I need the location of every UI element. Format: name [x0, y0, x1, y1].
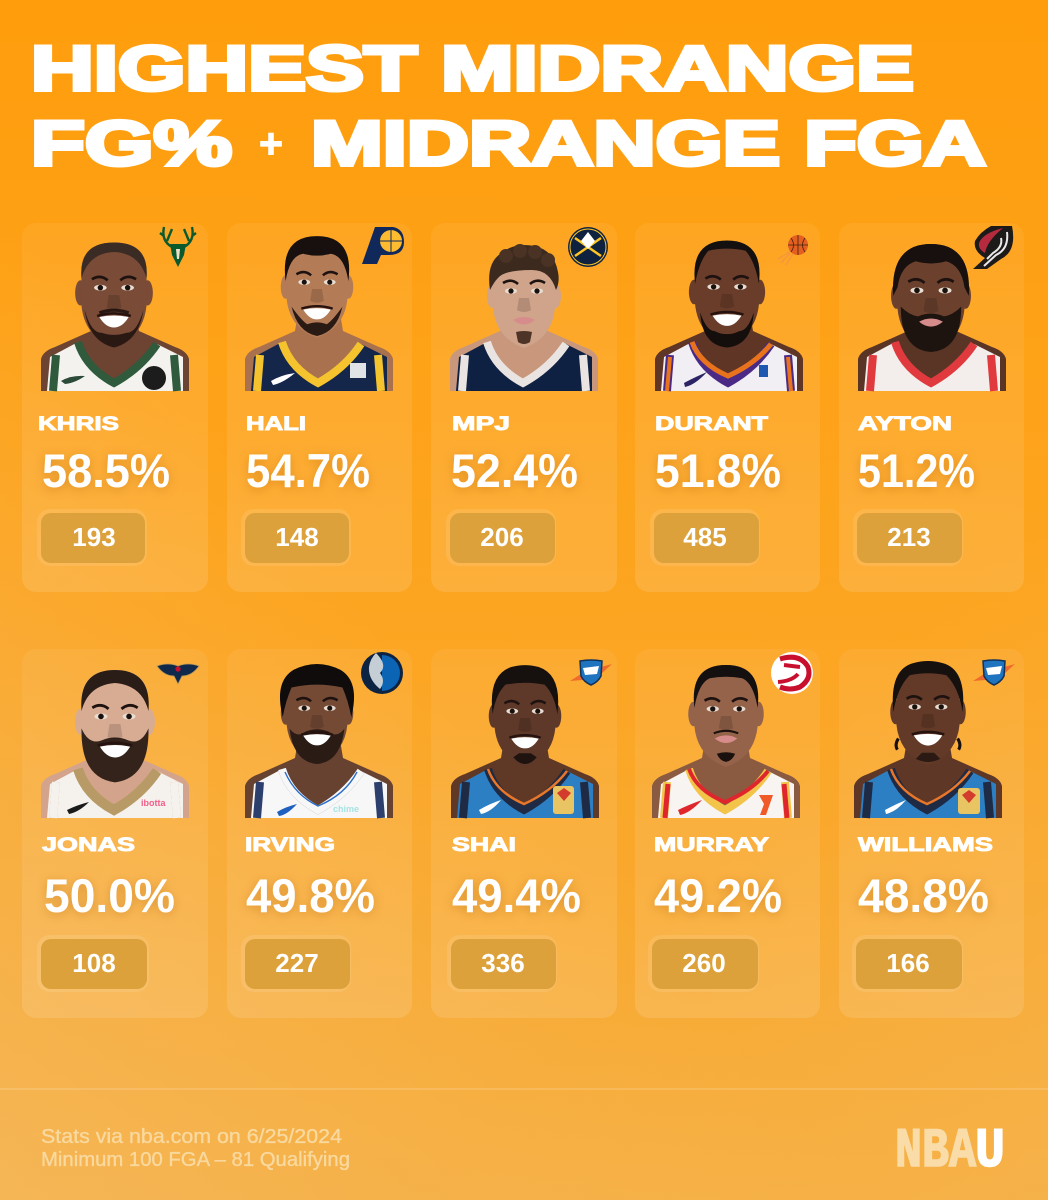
icon: Mavericks logo	[361, 652, 403, 694]
attempts pill	[37, 935, 149, 992]
title: MIDRANGE FGA	[311, 109, 986, 179]
title: FG%	[31, 109, 232, 179]
percentage: 49.8%	[246, 869, 375, 922]
percentage: 48.8%	[858, 869, 989, 922]
attempts pill	[447, 935, 557, 992]
portrait: Murray	[652, 665, 800, 818]
icon: Suns logo	[778, 235, 808, 265]
icon: Trail Blazers logo	[973, 226, 1013, 269]
name: DURANT	[655, 414, 769, 435]
name: MURRAY	[654, 835, 769, 856]
footer source text: Stats via nba.com on 6/25/2024	[41, 1126, 342, 1148]
NBAU logo: U	[975, 1119, 1005, 1183]
title	[31, 34, 986, 179]
attempts pill	[241, 935, 351, 992]
attempts pill: 213	[887, 522, 931, 552]
attempts pill	[446, 509, 556, 566]
icon: Pelicans logo	[157, 664, 199, 684]
portrait: Hali	[245, 236, 393, 391]
icon: Thunder logo	[570, 660, 612, 685]
attempts pill: 108	[72, 948, 116, 978]
attempts pill: 260	[682, 948, 726, 978]
attempts pill	[37, 509, 147, 566]
attempts pill: 166	[886, 948, 930, 978]
name: KHRIS	[38, 414, 119, 435]
portrait: Jonas	[41, 670, 189, 818]
icon: Hawks logo	[771, 652, 813, 694]
portrait: Irving: chime	[333, 804, 359, 814]
NBAU logo: NBA	[895, 1119, 976, 1183]
panel: Khris	[22, 223, 208, 592]
attempts pill: 227	[275, 948, 319, 978]
attempts pill: 206	[480, 522, 524, 552]
portrait: Jonas: ibotta	[141, 798, 166, 808]
percentage: 52.4%	[451, 444, 578, 497]
percentage: 49.4%	[452, 869, 581, 922]
title: +	[259, 120, 283, 167]
panel: Ayton	[839, 223, 1024, 592]
portrait: Shai	[451, 665, 599, 818]
attempts pill	[650, 509, 760, 566]
percentage: 58.5%	[42, 444, 170, 497]
name: IRVING	[245, 835, 335, 856]
name: WILLIAMS	[858, 835, 993, 856]
percentage: 54.7%	[246, 444, 370, 497]
panel: Williams	[839, 649, 1024, 1018]
icon: Bucks logo	[160, 227, 196, 267]
portrait: Khris	[41, 242, 189, 391]
attempts pill: 485	[683, 522, 727, 552]
name: MPJ	[452, 414, 510, 435]
attempts pill	[853, 509, 963, 566]
attempts pill	[648, 935, 759, 992]
attempts pill: 336	[481, 948, 525, 978]
footer source text	[41, 1126, 350, 1171]
name: AYTON	[858, 414, 952, 435]
footer source text: Minimum 100 FGA – 81 Qualifying	[41, 1149, 350, 1171]
attempts pill	[852, 935, 963, 992]
attempts pill: 148	[275, 522, 319, 552]
portrait: Ayton	[858, 244, 1006, 391]
name: JONAS	[42, 835, 135, 856]
panel: Irving	[227, 649, 412, 1018]
panel: MPJ	[431, 223, 617, 592]
icon: Nuggets logo	[568, 227, 608, 267]
panel: Hali	[227, 223, 412, 592]
panel: Murray	[635, 649, 820, 1018]
percentage: 49.2%	[654, 869, 782, 922]
icon: Pacers logo	[362, 227, 404, 264]
icon: Thunder logo	[973, 660, 1015, 685]
percentage: 51.8%	[655, 444, 781, 497]
portrait: Irving	[245, 664, 393, 818]
percentage: 51.2%	[858, 444, 975, 497]
attempts pill	[241, 509, 351, 566]
panel: Durant	[635, 223, 820, 592]
panel: Jonas	[22, 649, 208, 1018]
percentage: 50.0%	[44, 869, 175, 922]
attempts pill: 193	[72, 522, 116, 552]
portrait: Williams	[854, 661, 1002, 818]
title: HIGHEST MIDRANGE	[31, 34, 914, 104]
name: HALI	[246, 414, 306, 435]
panel: Shai	[431, 649, 617, 1018]
name: SHAI	[452, 835, 516, 856]
portrait: Durant	[655, 240, 803, 391]
portrait: MPJ	[450, 244, 598, 391]
